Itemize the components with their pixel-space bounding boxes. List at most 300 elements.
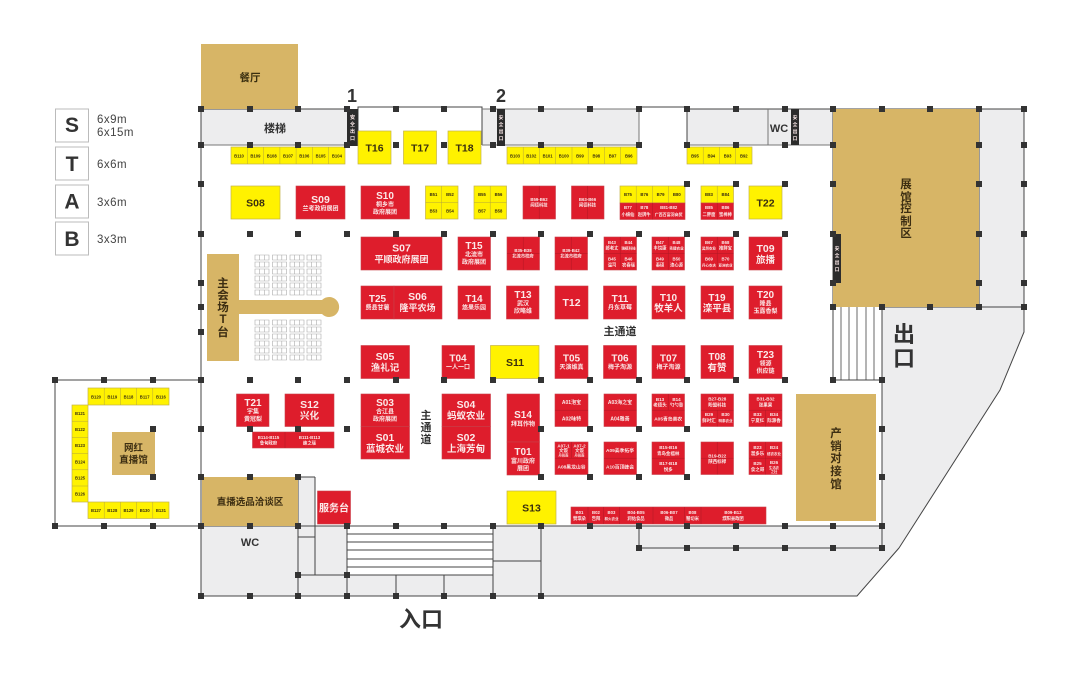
booths A07 A08: A07-1	[557, 444, 570, 448]
booths B27-B30: B30	[721, 412, 730, 417]
main stage T: 会	[217, 288, 229, 302]
booths B111-B115: B114-B115	[258, 435, 280, 440]
booth T08: T08	[708, 352, 726, 363]
sales matching hall	[796, 394, 876, 521]
main aisle vertical label: 道	[420, 432, 432, 446]
booth T05	[555, 346, 588, 378]
booths B43-B46: B43	[608, 240, 617, 245]
booths A07 A08: 丹彰南	[559, 452, 569, 458]
booths B23-B26: 溜多乐	[751, 450, 765, 457]
booths B83-B86: 蜜棒棒	[719, 211, 733, 218]
booth S05	[361, 346, 410, 378]
top B row middle: B96	[625, 154, 633, 158]
entrance stairs	[347, 526, 493, 575]
booth T09	[749, 237, 782, 270]
booths B35-B38: 北流市校府	[512, 252, 534, 260]
booths B13 B14 A05: B13	[656, 397, 665, 402]
booth S08	[231, 186, 280, 219]
top B row right: B94	[707, 154, 716, 158]
safety exit 4: 安	[835, 245, 840, 252]
booth T22: T22	[756, 198, 775, 210]
booth T13: 欣略维	[514, 307, 532, 315]
booths B111-B115	[252, 432, 334, 448]
booths B83-B86: B86	[722, 205, 730, 210]
main stage T: 台	[217, 325, 229, 339]
booths B31-B34: 际源香	[767, 417, 781, 424]
booths A03 A04	[604, 394, 636, 426]
main stage T: 场	[217, 301, 229, 314]
booth T13: T13	[514, 290, 532, 301]
booth T11	[604, 286, 636, 319]
booths B75-B82: B81-B82	[660, 205, 678, 210]
legend: booth sizes: S	[65, 114, 79, 137]
booths B39-B42: B39-B42	[562, 248, 580, 253]
service desk	[318, 491, 350, 524]
booths B67-B70: 昊然农业	[702, 246, 716, 250]
booths B23-B26: B23	[753, 445, 762, 450]
booths B13 B14 A05: 老德头	[653, 402, 667, 408]
booths B75-B82: 小蜻仙	[622, 211, 634, 218]
booth T06: T06	[611, 354, 629, 364]
live selection negotiation area: 直播选品洽谈区	[217, 496, 284, 508]
top B row middle: B101	[543, 154, 553, 158]
booth T21: T21	[244, 398, 262, 409]
booth T14	[458, 286, 490, 319]
booth S14	[507, 394, 540, 442]
booth S10	[361, 186, 410, 219]
booths B67-B70: B67	[705, 240, 714, 245]
annex B row left	[72, 405, 88, 502]
booth S14: 拜耳作物	[511, 420, 535, 428]
booths B111-B115: B111-B113	[299, 435, 321, 440]
exit label: 出	[893, 322, 915, 347]
exit label: 口	[893, 346, 915, 371]
booth T23: 供应链	[756, 367, 775, 375]
booth T19	[701, 286, 734, 319]
annex B row top: B117	[140, 394, 150, 400]
booth S08: S08	[246, 198, 265, 210]
main aisle label: 主通道	[604, 324, 636, 338]
booth T09: 旅播	[756, 254, 775, 266]
booths B75-B82: B79	[657, 192, 665, 197]
booth T10: T10	[660, 293, 678, 304]
booths B19-B22: B19-B22	[708, 454, 727, 458]
booth S03: 合江县	[376, 408, 394, 416]
booths B13 B14 A05	[652, 394, 684, 426]
booth T21	[236, 394, 269, 426]
safety exit 1: 全	[350, 121, 355, 128]
bottom B row booths: B08	[689, 510, 697, 515]
booths A01 A02	[555, 394, 588, 426]
booths B55-B58: B57	[478, 208, 487, 214]
annex B row left: B121	[75, 411, 86, 416]
booths B47-B50: 丰饶康	[654, 244, 667, 252]
booths A07 A08: 文饭	[575, 447, 584, 454]
main stage T	[207, 254, 339, 361]
booths B75-B82: B78	[640, 205, 649, 210]
booths B13 B14 A05: 勺勺香	[670, 402, 684, 408]
booths B43-B46	[604, 237, 636, 270]
annex B row left: B124	[75, 460, 86, 464]
safety exit 4: 口	[835, 267, 840, 273]
booth S01: 蓝城农业	[366, 443, 404, 455]
booth T18: T18	[455, 142, 474, 154]
booth T04: 一人一口	[446, 364, 470, 371]
booths B23-B26: 纽农农业	[767, 451, 781, 456]
booth S13: S13	[522, 502, 541, 514]
booth T12	[555, 286, 588, 319]
booths B15-B18: 青岛金福林	[657, 450, 680, 457]
booth S07: S07	[392, 242, 411, 254]
safety exit 3: 口	[793, 136, 798, 142]
structural pillars	[55, 109, 1024, 596]
booth T08: 有赞	[707, 362, 727, 374]
booth T04: T04	[449, 354, 467, 364]
booths B67-B70: 亚洲农业	[718, 262, 733, 268]
booths B43-B46: B45	[608, 256, 617, 262]
booths B31-B34: B34	[770, 412, 779, 417]
booths B83-B86: B83	[705, 192, 714, 197]
control area: 区	[900, 227, 912, 240]
booth T18	[448, 131, 481, 164]
wechat live hall	[112, 432, 155, 475]
bottom B row booths: B03	[608, 510, 616, 515]
booth T05: T05	[563, 354, 581, 364]
booth S12	[285, 394, 334, 426]
legend: booth sizes: A	[64, 190, 80, 214]
booth S13	[507, 491, 556, 524]
booth T22	[749, 186, 782, 219]
booth S14: S14	[514, 410, 532, 421]
safety exit 1: 出	[350, 128, 355, 135]
annex B row top: B116	[156, 394, 166, 400]
bottom B row booths: 微品	[665, 515, 673, 522]
annex B row bottom	[88, 502, 169, 518]
bottom B row booths: B02	[592, 510, 601, 515]
booths B59-B62: 闻德科技	[530, 202, 548, 208]
booths B67-B70: B69	[705, 256, 714, 262]
booths B75-B82	[620, 186, 685, 220]
booth T20: 玉露香梨	[753, 307, 778, 315]
booths A09 A10	[604, 442, 636, 474]
safety exit 1	[347, 109, 358, 146]
top B row left	[231, 147, 345, 164]
booths B19-B22	[701, 442, 734, 474]
booth T23: 领源	[759, 360, 772, 368]
annex B row left: B125	[75, 476, 86, 480]
booth T01: 展团	[517, 466, 529, 472]
booths B47-B50	[652, 237, 684, 270]
safety exit 3: 全	[793, 121, 798, 128]
top B row middle: B103	[510, 154, 521, 158]
booths B15-B18	[652, 442, 684, 474]
booths A07 A08: 丹彰南	[575, 452, 585, 458]
booth T17: T17	[411, 142, 429, 154]
bottom B row booths: 蟹切米	[686, 515, 700, 522]
booths B43-B46: 温司	[608, 262, 616, 268]
booth S03	[361, 394, 410, 426]
safety exit 4	[833, 234, 841, 283]
booth S06: 隆平农场	[399, 302, 436, 313]
booth T20: 隆县	[759, 300, 772, 308]
booth S06: S06	[408, 291, 427, 303]
booths B51-B54: B52	[446, 192, 455, 197]
wechat live hall: 直播馆	[119, 454, 148, 466]
booths B59-B62	[523, 186, 556, 219]
booths B51-B54: B51	[430, 192, 438, 197]
top B row left: B104	[332, 154, 343, 158]
sales matching hall: 对	[830, 451, 842, 465]
booths B55-B58	[474, 186, 506, 219]
booth S02	[442, 426, 490, 459]
booths B31-B34: B31-B32	[756, 396, 775, 402]
sales matching hall: 接	[830, 464, 842, 478]
booths A03 A04: A03海之宝	[608, 399, 632, 406]
booths B15-B18: B15-B16	[659, 445, 678, 450]
booth S02: 上海芳甸	[447, 443, 485, 455]
booth T11: 丹东草莓	[608, 304, 632, 312]
booth T20	[749, 286, 782, 319]
annex B row bottom: B130	[140, 508, 150, 513]
canteen	[201, 44, 298, 109]
top B row right: B92	[740, 154, 748, 158]
booths B47-B50: 渣心源	[670, 262, 684, 268]
exit number 2: 2	[496, 86, 506, 106]
legend: booth sizes: 6x6m	[97, 159, 127, 171]
booth T01	[507, 442, 540, 475]
safety exit 3	[791, 109, 799, 145]
booth T16: T16	[365, 142, 384, 154]
booths B19-B22: 陕西标禄	[708, 458, 727, 465]
booth T23: T23	[757, 350, 775, 361]
booths B39-B42: 北流市校府	[560, 252, 582, 260]
booth T21: 黄冠梨	[244, 415, 262, 423]
legend: booth sizes: 3x6m	[97, 197, 127, 209]
booth S11	[490, 346, 539, 378]
booth T05: 天演维真	[559, 363, 584, 371]
audience seats	[255, 255, 321, 360]
safety exit 2: 安	[499, 114, 504, 121]
annex B row bottom: B129	[123, 508, 134, 513]
building floor areas	[201, 109, 1024, 596]
booths B31-B34	[749, 394, 782, 426]
booths B111-B115: 峰之瑞	[303, 440, 317, 446]
booth T13	[506, 286, 539, 319]
booths B23-B26: B25	[753, 461, 762, 466]
top B row right: B93	[724, 154, 732, 158]
booths B27-B30: B29	[705, 412, 714, 417]
bottom B row booths: 和火农业	[604, 516, 619, 521]
WC top: WC	[770, 123, 788, 135]
booths B27-B30	[701, 394, 734, 426]
booths B51-B54: B54	[446, 208, 455, 214]
booths B35-B38	[507, 237, 540, 270]
safety exit 2: 全	[499, 121, 504, 128]
booth T01: 富川政府	[511, 457, 535, 465]
top B row left: B106	[299, 154, 310, 158]
booths B23-B26: B26	[770, 460, 779, 465]
booths B27-B30: 鲜时汇	[702, 417, 716, 424]
booths B63-B66: 闻德科技	[579, 202, 597, 208]
annex B row left: B122	[75, 427, 86, 432]
booths A07 A08: A07-2	[573, 444, 586, 448]
booth S10: S10	[376, 191, 394, 202]
booth T06	[604, 346, 636, 378]
legend: booth sizes: 6x9m	[97, 114, 127, 126]
booth S04: S04	[457, 399, 475, 411]
legend: booth sizes: B	[64, 228, 80, 251]
booths B13 B14 A05: A05青岛美农	[654, 416, 682, 422]
booths B75-B82: 广西百富羽商贸	[655, 211, 683, 217]
booths B111-B115: 鲁甸政府	[260, 440, 278, 446]
top B row left: B109	[250, 154, 261, 158]
safety exit 1: 口	[350, 136, 355, 142]
booths B23-B26	[749, 442, 782, 474]
booth S01: S01	[376, 432, 394, 444]
main stage T: 主	[217, 276, 229, 290]
booths B15-B18: B17-B18	[659, 461, 678, 466]
booth S10: 桐乡市	[376, 200, 394, 208]
booth T08	[701, 346, 734, 378]
booths B83-B86: B84	[722, 192, 730, 197]
booths B75-B82: B77	[624, 205, 633, 210]
booths B75-B82: B76	[640, 192, 649, 197]
annex B row top	[88, 388, 169, 405]
live selection negotiation area	[202, 477, 298, 526]
bottom B row booths: 濮阳县政团	[722, 515, 744, 522]
control area: 制	[900, 215, 912, 228]
booths A07 A08	[555, 442, 588, 474]
booths B83-B86: 二胖面	[703, 211, 716, 218]
main aisle vertical label: 主	[420, 408, 432, 422]
booths B51-B54: B53	[430, 208, 438, 214]
booth S09: S09	[311, 194, 330, 206]
booths B31-B34: 张果果	[759, 402, 773, 408]
booths B27-B30: B27-B28	[708, 396, 727, 402]
booths B27-B30: 明泰农业	[718, 418, 733, 423]
booth S03: S03	[376, 398, 394, 409]
booths B43-B46: B44	[625, 240, 633, 245]
booth S04	[442, 394, 490, 426]
safety exit 2: 出	[499, 128, 504, 135]
booth T15: T15	[465, 241, 483, 252]
booths B15-B18: 悦多	[664, 466, 673, 473]
booth S12: 兴化	[300, 410, 319, 422]
booths B27-B30: 盼盟科技	[708, 402, 727, 408]
booths B23-B26: 生活农	[769, 465, 780, 470]
booths A01 A02: A02味特	[562, 416, 581, 422]
service desk: 服务台	[319, 502, 349, 514]
safety exit 3: 出	[793, 128, 798, 135]
booths A07 A08: 文饭	[559, 447, 568, 454]
annex B row top: B119	[107, 394, 118, 400]
canteen: 餐厅	[240, 71, 261, 84]
booths B75-B82: B80	[673, 192, 681, 197]
booths B31-B34: 宁夏红	[751, 417, 765, 424]
booths B67-B70: 丹心农夫	[702, 262, 716, 268]
safety exit 1: 安	[350, 114, 355, 121]
booths B35-B38: B35-B38	[514, 248, 532, 253]
top B row left: B110	[234, 154, 245, 158]
booths B47-B50: B49	[656, 256, 665, 262]
booth T15: 北流市	[465, 250, 483, 258]
booths B31-B34: B33	[753, 412, 762, 417]
booth T10	[652, 286, 685, 319]
booths B43-B46: 郎老丈	[606, 244, 619, 252]
booth S03: 政府展团	[373, 415, 397, 423]
stairs label: 楼梯	[264, 121, 286, 135]
booth S11: S11	[506, 357, 524, 369]
WC bottom: WC	[241, 537, 259, 549]
booth S09: 兰考政府展团	[302, 204, 339, 212]
booths B47-B50: B50	[673, 256, 681, 262]
booths B51-B54	[426, 186, 458, 219]
control area: 馆	[900, 190, 912, 204]
booth T16	[358, 131, 391, 164]
booths B47-B50: B47	[656, 240, 665, 245]
control area: 控	[900, 201, 912, 215]
wechat live hall: 网红	[124, 442, 143, 454]
exit number 1: 1	[347, 86, 357, 106]
bottom B row booths: B09-B12	[724, 510, 742, 515]
booth S05: S05	[376, 351, 394, 363]
legend: booth sizes	[56, 109, 134, 255]
booths B47-B50: 秀健农业	[669, 246, 684, 250]
booth T07: T07	[660, 354, 678, 364]
booth T13: 武汉	[517, 300, 529, 308]
annex B row top: B120	[91, 394, 102, 400]
control area: 展	[900, 178, 912, 191]
top B row middle: B99	[576, 154, 585, 158]
booth S10: 政府展团	[373, 208, 397, 216]
safety exit 4: 出	[835, 259, 840, 266]
booths B43-B46: 瑞祺科技	[621, 246, 636, 250]
booth T07	[652, 346, 685, 378]
booths B23-B26: B24	[770, 445, 779, 450]
booth S09	[296, 186, 345, 219]
sales matching hall: 馆	[830, 477, 842, 491]
safety exit 4: 全	[835, 252, 840, 259]
booth T14: T14	[465, 294, 483, 305]
control area	[833, 109, 979, 307]
booth T10: 牧羊人	[654, 302, 683, 314]
booth T04	[442, 346, 474, 378]
booth T23	[749, 346, 782, 378]
booth S01	[361, 426, 410, 459]
booth T21: 宇集	[247, 408, 259, 416]
booth T12: T12	[562, 297, 581, 309]
bottom B row booths: 润佑食品	[627, 515, 645, 522]
entrance label: 入口	[399, 607, 443, 632]
top B row middle: B102	[526, 154, 537, 158]
booths A01 A02: A01泡宝	[562, 399, 581, 406]
bottom B row booths: B06-B07	[660, 510, 678, 515]
booths B23-B26: 食之哥	[751, 466, 765, 473]
booths B55-B58: B58	[495, 208, 503, 214]
booth T15	[458, 237, 490, 270]
booth S04: 蚂蚁农业	[447, 410, 485, 422]
top B row right: B95	[691, 154, 700, 158]
top B row middle	[507, 147, 637, 164]
annex B row top: B118	[124, 394, 134, 400]
booth T15: 政府展团	[462, 258, 486, 266]
bottom B row booths: 赞琪朵	[573, 515, 587, 522]
annex B row left: B126	[75, 492, 86, 496]
annex B row bottom: B128	[107, 508, 118, 513]
booths B55-B58: B55	[478, 192, 487, 197]
annex B row bottom: B127	[91, 508, 102, 513]
booths B63-B66	[572, 186, 604, 219]
